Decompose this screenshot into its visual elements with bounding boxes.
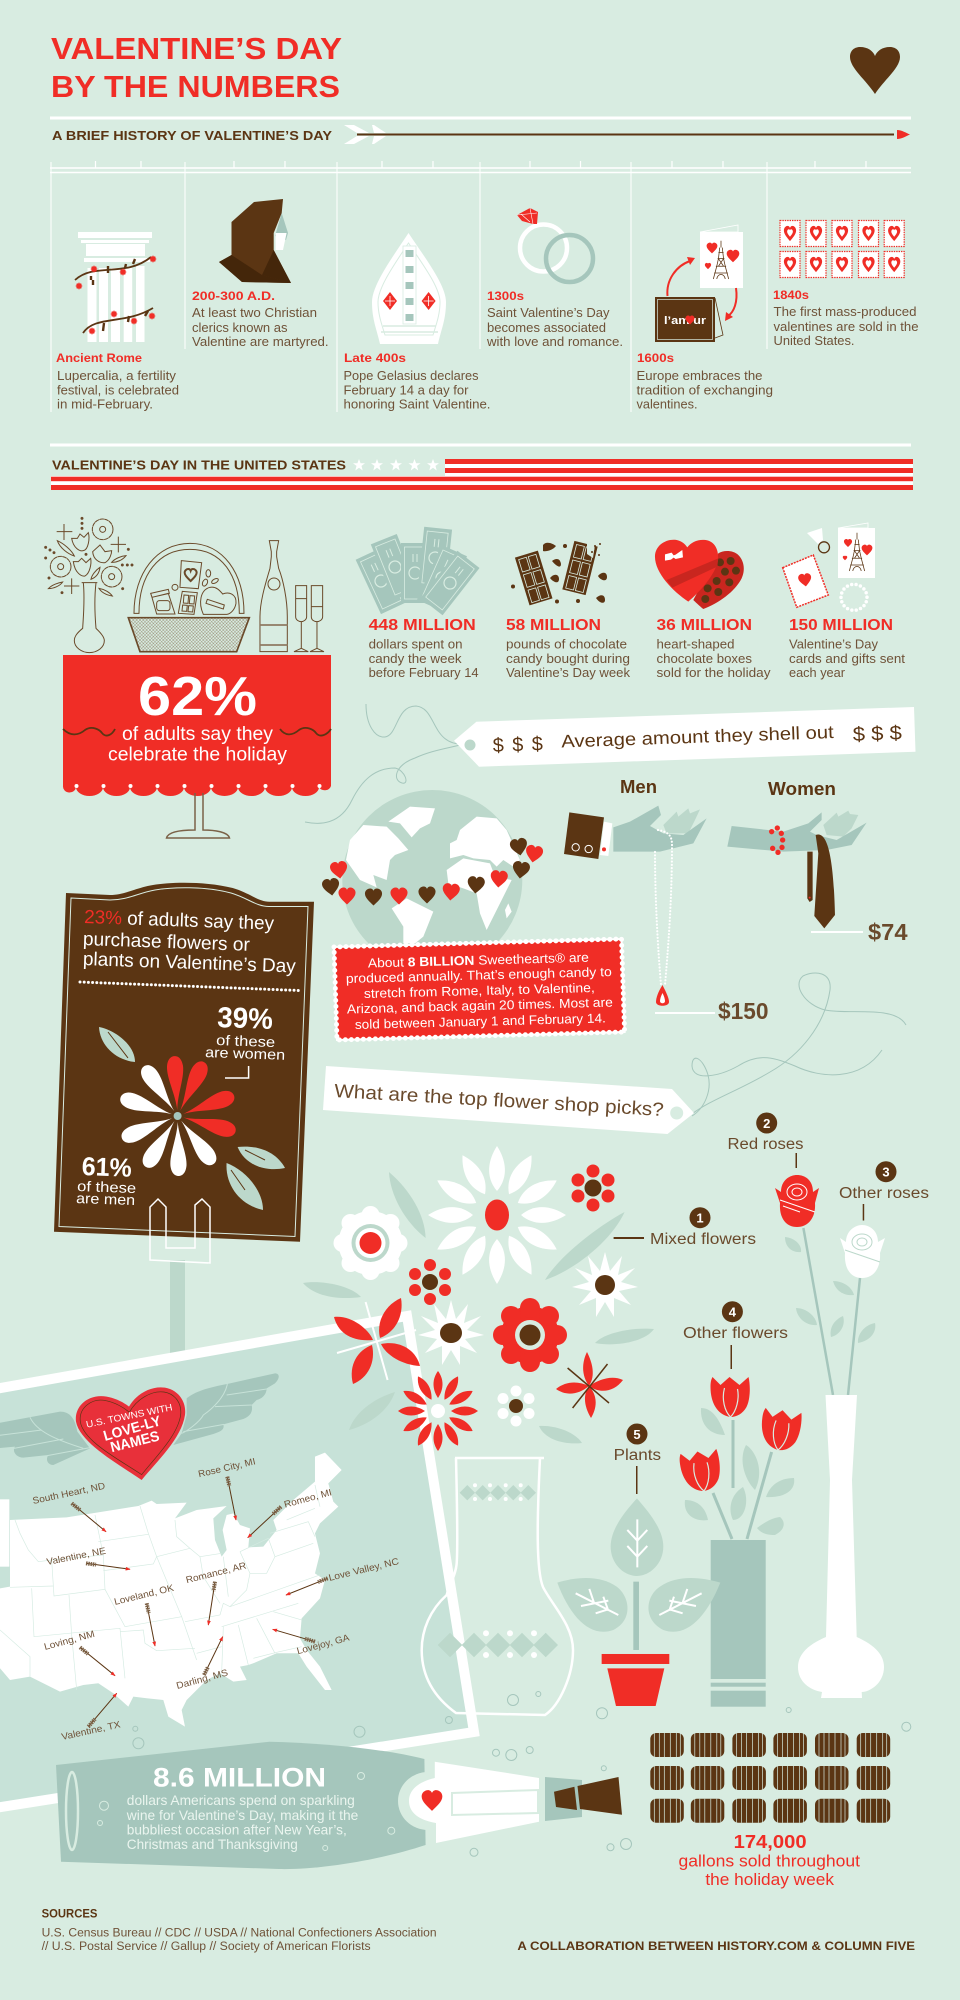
town labels: Valentine, TX: [61, 1719, 122, 1743]
panel: champagne bottle 8.6 million: dollars Americans spend on sparkling: [127, 1792, 355, 1808]
icon: white rose: [840, 1225, 885, 1278]
icon: valentine exchange: [655, 225, 743, 342]
label: Men: Men: [620, 777, 657, 797]
label: 5 plants: Plants: [614, 1447, 661, 1464]
panel: flowers sign: [54, 883, 314, 1242]
stat: 150 million: each year: [789, 666, 845, 680]
label: 1 mixed flowers: 1: [696, 1210, 704, 1226]
panel: Ancient Rome: festival, is celebrated: [57, 384, 179, 398]
icon: chocolate bars: [511, 541, 607, 605]
icon: valentine stamps: [780, 220, 904, 278]
town labels: Loving, NM: [43, 1629, 96, 1653]
panel: 62% table: [63, 655, 331, 838]
stat: 61% men: of these: [77, 1179, 136, 1197]
panel: 1600s: tradition of exchanging: [636, 384, 773, 398]
panel: 62% table: celebrate the holiday: [108, 745, 288, 766]
stat: 174,000 gallons: the holiday week: [705, 1871, 835, 1889]
town labels: Darling, MS: [175, 1668, 229, 1692]
globe with heart garland: [321, 790, 544, 970]
panel: Ancient Rome: [56, 232, 179, 412]
value: $74: [811, 919, 908, 945]
panel: 1840s: [773, 220, 919, 348]
label: 2 red roses: 2: [763, 1116, 770, 1131]
flower: white starburst left: [418, 1300, 484, 1365]
town labels: Love Valley, NC: [328, 1556, 400, 1584]
badge: winged heart: NAMES: [109, 1428, 161, 1456]
icon: cards and gifts: [783, 523, 875, 610]
stat: 58 million: Valentine’s Day week: [506, 666, 631, 680]
flower: white starburst right: [572, 1252, 638, 1317]
teal vase: [711, 1540, 766, 1707]
icon: monk: [219, 199, 291, 283]
town labels: Romance, AR: [185, 1561, 248, 1586]
value: $74: $74: [868, 919, 908, 945]
title: [51, 31, 342, 104]
panel: 1600s: Europe embraces the: [636, 369, 763, 383]
stat: 174,000 gallons: [678, 1832, 860, 1889]
title: BY THE NUMBERS: [51, 69, 340, 104]
label: 5 plants: 5: [633, 1427, 641, 1442]
flower: red dot cluster lower: [409, 1259, 451, 1305]
stat: 448 million: before February 14: [369, 666, 479, 680]
stat: 39% women: are women: [205, 1045, 285, 1064]
bottle cap: [545, 1777, 582, 1821]
panel: 1300s: [486, 208, 623, 349]
flower: white scalloped: [334, 1206, 408, 1280]
panel: 1300s: becomes associated: [487, 321, 606, 335]
icon: heart chocolate box: [655, 540, 744, 609]
panel: Late 400s: Pope Gelasius declares: [344, 369, 478, 383]
label: 3 other roses: [839, 1161, 929, 1220]
panel: 200-300 AD: 200-300 A.D.: [192, 289, 275, 303]
icon: man's hand with necklace: [564, 806, 707, 1006]
label: 3 other roses: 3: [882, 1164, 890, 1180]
heading: brief history: A BRIEF HISTORY OF VALENTINE’S DAY: [52, 128, 332, 143]
panel: 200-300 AD: Valentine are martyred.: [192, 335, 329, 349]
stat: 150 million: 150 MILLION: [789, 617, 893, 634]
label: 1 mixed flowers: Mixed flowers: [650, 1231, 756, 1248]
stat: 448 million: candy the week: [369, 652, 462, 666]
icon: valentine exchange: l’am ur: [664, 315, 707, 327]
panel: Late 400s: honoring Saint Valentine.: [344, 398, 490, 412]
title: VALENTINE’S DAY: [51, 31, 342, 66]
sign post: [170, 1260, 185, 1356]
panel: 1840s: United States.: [774, 334, 854, 348]
illustration: flowers in vase: [44, 517, 133, 653]
label: 2 red roses: [728, 1112, 804, 1168]
tag: top flower shop picks: What are the top flower shop picks?: [334, 1081, 664, 1121]
flower: small white: [498, 1386, 534, 1426]
town labels: South Heart, ND: [32, 1481, 106, 1507]
panel: Late 400s: Late 400s: [344, 351, 406, 365]
panel: 1300s: with love and romance.: [486, 335, 623, 349]
stat: 58 million: 58 MILLION: [506, 617, 601, 634]
bottle neck: [409, 1762, 539, 1843]
illustration: gift basket: [128, 543, 249, 652]
label: 1 mixed flowers: [614, 1207, 756, 1248]
stat: 448 million: 448 MILLION: [369, 617, 476, 634]
stat: 61% men: are men: [76, 1191, 135, 1209]
panel: map of love-ly towns: [0, 1316, 474, 1808]
panel: champagne bottle 8.6 million: wine for Valentine’s Day, making it the: [126, 1807, 359, 1823]
town labels: Lovejoy, GA: [296, 1632, 351, 1657]
flower: red spiky: [398, 1371, 478, 1451]
panel: 200-300 AD: At least two Christian: [192, 306, 317, 320]
panel: 1600s: valentines.: [636, 398, 698, 412]
panel: 1840s: 1840s: [773, 288, 809, 302]
label: 3 other roses: Other roses: [839, 1185, 929, 1202]
label: Women: Women: [768, 779, 836, 799]
flower: red pinwheel: [334, 1298, 420, 1384]
stat: 150 million: cards and gifts sent: [789, 652, 906, 666]
roses with stems: [775, 1175, 885, 1698]
panel: flowers sign: 23% of adults say they: [84, 907, 275, 935]
stat: 61% men: 61%: [81, 1151, 132, 1183]
panel: 1600s: [636, 225, 773, 412]
town labels: Loveland, OK: [113, 1583, 176, 1608]
tag: average amount: Average amount they shell out: [561, 722, 834, 751]
label: 4 other flowers: [683, 1301, 788, 1369]
chart: flower 39/61 split: [118, 1056, 238, 1176]
label: 4 other flowers: Other flowers: [683, 1325, 788, 1342]
town labels: Romeo, MI: [283, 1487, 333, 1511]
value: $150: $150: [718, 998, 768, 1024]
panel: Late 400s: February 14 a day for: [344, 384, 468, 398]
sources: SOURCES: [42, 1909, 98, 1921]
badge: winged heart: LOVE-LY: [102, 1413, 163, 1445]
icon: dollar bills: [356, 527, 480, 615]
hearts garland: [321, 837, 544, 906]
callout: 8 billion sweethearts: stretch from Rome, Italy, to Valentine,: [364, 980, 595, 1001]
stat: 36 million: heart-shaped: [656, 638, 735, 652]
stat: 448 million: dollars spent on: [369, 638, 463, 652]
stat: 61% men: [76, 1151, 136, 1209]
vase diamond bands: [438, 1485, 558, 1657]
callout: 8 billion sweethearts: Arizona, and back again 20 times. Most are: [347, 995, 613, 1016]
panel: Ancient Rome: Lupercalia, a fertility: [57, 369, 177, 383]
panel: 1840s: valentines are sold in the: [774, 320, 919, 334]
stat: 36 million: 36 MILLION: [656, 617, 752, 634]
flower: big white daisy: [428, 1146, 566, 1284]
stat: 58 million: [506, 541, 631, 680]
panel: 62% table: 62%: [138, 665, 257, 727]
icon: wings: [0, 1373, 279, 1480]
value: $150: [655, 998, 768, 1024]
timeline ruler: [50, 161, 911, 412]
tag: average amount: [454, 707, 916, 767]
sources: [42, 1909, 437, 1953]
light leaves behind bouquet: [303, 1172, 654, 1443]
label: 2 red roses: Red roses: [728, 1136, 804, 1153]
chart: barrels: [650, 1733, 890, 1823]
stat: 150 million: [783, 523, 906, 680]
tag: average amount: $ $ $: [492, 733, 543, 757]
stat: 36 million: chocolate boxes: [656, 652, 752, 666]
credit: A COLLABORATION BETWEEN HISTORY.COM & COLUMN FIVE: [517, 1941, 915, 1953]
panel: 62% table: of adults say they: [122, 724, 273, 745]
leaves on sign: [99, 1027, 285, 1210]
map of United States: [0, 1453, 342, 1727]
badge: winged heart: [0, 1373, 279, 1480]
panel: Late 400s: [344, 233, 490, 412]
flower: red cross: [556, 1352, 623, 1418]
stat: 448 million: [356, 527, 480, 680]
bottle cork: [554, 1777, 622, 1815]
continents: [346, 807, 520, 943]
stat: 39% women: 39%: [217, 1002, 274, 1036]
panel: 1300s: 1300s: [487, 289, 524, 303]
heading: in the United States: VALENTINE’S DAY IN THE UNITED STATES: [52, 458, 346, 472]
label: 5 plants: [614, 1424, 661, 1494]
panel: champagne bottle 8.6 million: Christmas and Thanksgiving: [127, 1836, 298, 1852]
stat: 150 million: Valentine’s Day: [789, 638, 879, 652]
stat: 36 million: [655, 540, 771, 680]
sources: U.S. Census Bureau // CDC // USDA // National Confectioners Association: [42, 1928, 437, 1940]
tag: average amount: $ $ $: [852, 722, 902, 746]
callout: 8 billion sweethearts: [334, 939, 625, 1040]
stat: 36 million: sold for the holiday: [656, 666, 771, 680]
callout: 8 billion sweethearts: produced annually. That’s enough candy to: [346, 964, 612, 986]
callout: 8 billion sweethearts: About 8 BILLION Sweethearts® are: [368, 950, 589, 970]
panel: champagne bottle 8.6 million: bubbliest occasion after New Year’s,: [127, 1821, 347, 1837]
icon: woman's hand with tie: [727, 811, 867, 928]
panel: flowers sign: purchase flowers or: [83, 929, 251, 956]
illustration: champagne and glasses: [260, 541, 324, 652]
flower: red dot cluster top: [572, 1164, 614, 1212]
panel: 200-300 AD: [192, 199, 329, 349]
flag stripes: [51, 459, 913, 490]
flower: red scalloped: [493, 1298, 567, 1372]
panel: 1840s: The first mass-produced: [774, 305, 917, 319]
sources: // U.S. Postal Service // Gallup // Society of American Florists: [42, 1941, 371, 1953]
icon: interlocked rings: [517, 208, 593, 282]
arrow: timeline arrow: [344, 125, 910, 144]
badge: winged heart: U.S. TOWNS WITH: [85, 1402, 174, 1431]
town labels: [32, 1456, 400, 1743]
arrow fletchings: [72, 1477, 328, 1727]
strings to flower tag: [692, 973, 906, 1116]
panel: 1600s: 1600s: [637, 351, 674, 365]
icon: red rose: [775, 1175, 819, 1227]
callout: 8 billion sweethearts: sold between January 1 and February 14.: [355, 1010, 606, 1032]
panel: champagne bottle 8.6 million: 8.6 MILLION: [153, 1763, 326, 1793]
panel: 200-300 AD: clerics known as: [192, 321, 288, 335]
stat: 58 million: candy bought during: [506, 652, 630, 666]
tag: top flower shop picks: [323, 1066, 694, 1134]
town labels: Valentine, NE: [46, 1546, 107, 1568]
town labels: Rose City, MI: [197, 1456, 257, 1480]
stat: 39% women: [205, 1002, 285, 1078]
stat: 39% women: of these: [216, 1033, 275, 1051]
stat: 174,000 gallons: gallons sold throughout: [678, 1853, 860, 1871]
icon: column with vines: [75, 232, 156, 342]
glass vase: [422, 1458, 573, 1715]
icon: papal mitre: [372, 233, 446, 344]
panel: 1300s: Saint Valentine’s Day: [487, 306, 610, 320]
panel: flowers sign: plants on Valentine’s Day: [83, 949, 297, 977]
strings to price tag: [305, 704, 468, 823]
table stand: [166, 793, 230, 838]
icon: brown heart: [850, 47, 900, 94]
town arrows: [72, 1477, 328, 1727]
panel: Ancient Rome: in mid-February.: [57, 398, 153, 412]
stat: 174,000 gallons: 174,000: [734, 1832, 807, 1852]
panel: Ancient Rome: Ancient Rome: [56, 351, 142, 365]
sign bracket: [150, 1199, 210, 1263]
panel: champagne bottle 8.6 million: [56, 1742, 622, 1869]
white vase: [798, 1395, 884, 1698]
bubbles: [133, 1692, 911, 1856]
tulips in teal vase: [679, 1377, 803, 1707]
potted plant: [557, 1498, 720, 1706]
stat: 58 million: pounds of chocolate: [506, 638, 627, 652]
label: 4 other flowers: 4: [729, 1304, 737, 1320]
